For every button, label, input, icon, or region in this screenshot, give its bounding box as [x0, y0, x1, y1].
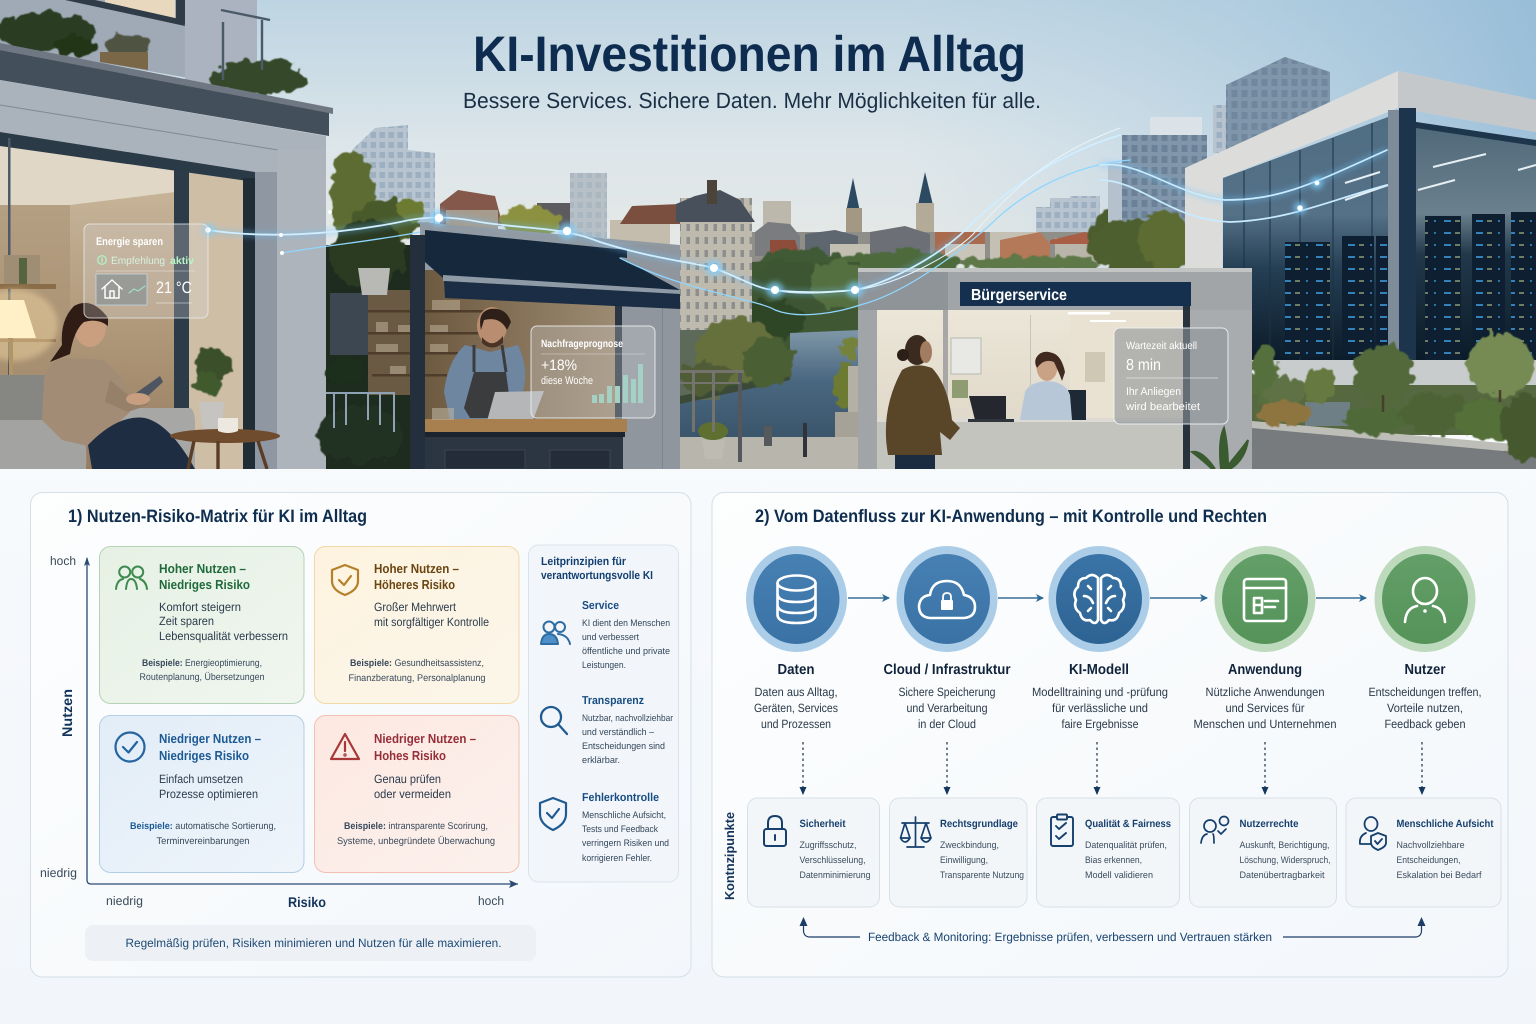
note bar: Regelmäßig prüfen, Risiken minimieren und Nutzen für alle maximieren.: [126, 936, 502, 950]
principle: Fehlerkontrolle: Tests und Feedback: [582, 823, 658, 834]
card: Sicherheit: Zugriffsschutz,: [800, 839, 856, 850]
glass card: Wartezeit: wird bearbeitet: [1125, 401, 1200, 413]
quadrant: high benefit, higher risk: Hoher Nutzen –: [374, 561, 459, 576]
quadrant: high benefit, low risk: Niedriges Risiko: [159, 577, 250, 592]
quadrant: high benefit, low risk: Hoher Nutzen –: [159, 561, 246, 576]
glass card: Energie sparen: 21 °C: [156, 279, 192, 297]
woman on sofa with tablet: [0, 303, 195, 470]
matrix axes: Risiko: [288, 894, 326, 910]
quadrant: low benefit, low risk: Niedriger Nutzen –: [159, 731, 261, 746]
icon: cloud with lock: [919, 581, 975, 618]
card: Rechtsgrundlage: [890, 798, 1027, 907]
city skyline: [352, 125, 1136, 270]
principle: Fehlerkontrolle: korrigieren Fehler.: [582, 852, 652, 863]
principle: Service: KI dient den Menschen: [582, 617, 670, 628]
step: Cloud / Infrastruktur: in der Cloud: [918, 717, 976, 731]
principle: Transparenz: Entscheidungen sind: [582, 740, 665, 751]
heading: data flow: 2) Vom Datenfluss zur KI-Anwendung – mit Kontrolle und Rechten: [755, 506, 1267, 526]
principle: Fehlerkontrolle: verringern Risiken und: [582, 837, 669, 848]
step: Nutzer: Vorteile nutzen,: [1387, 701, 1463, 715]
card: Sicherheit: Datenminimierung: [800, 869, 870, 880]
principle: Transparenz: und verständlich –: [582, 726, 655, 737]
icon: check circle: [116, 732, 144, 762]
matrix axes: niedrig: [40, 866, 77, 880]
quadrant: high benefit, higher risk: Finanzberatung, Personalplanung: [348, 673, 486, 684]
panel: Nutzen-Risiko-Matrix: [30, 492, 691, 977]
quadrant: high benefit, low risk: Routenplanung, Übersetzungen: [140, 671, 264, 683]
step: Nutzer: [1368, 546, 1482, 731]
card: Nutzerrechte: Nutzerrechte: [1240, 818, 1299, 830]
principle: Fehlerkontrolle: Fehlerkontrolle: [582, 792, 659, 804]
card: Menschliche Aufsicht: Eskalation bei Bedarf: [1396, 869, 1482, 880]
card: Rechtsgrundlage: Zweckbindung,: [940, 839, 999, 850]
icon: people: [116, 566, 147, 589]
icon: application window: [1244, 579, 1286, 621]
step: Daten: und Prozessen: [761, 717, 831, 731]
sidebar: Leitprinzipien: [528, 545, 678, 882]
glass card: Energie sparen: [84, 224, 208, 318]
glass card: Energie sparen: aktiv: [170, 255, 194, 267]
step: Anwendung: Menschen und Unternehmen: [1194, 717, 1336, 731]
principle: Service: Leistungen.: [582, 659, 626, 670]
quadrant: low benefit, high risk: Systeme, unbegründete Überwachung: [337, 835, 495, 847]
card: Sicherheit: [748, 798, 880, 907]
step: Nutzer: Feedback geben: [1384, 717, 1466, 731]
icon: brain: [1074, 575, 1125, 623]
sign: Bürgerservice: Bürgerservice: [971, 287, 1067, 304]
card: Qualität & Fairness: [1036, 798, 1180, 907]
step: Cloud / Infrastruktur: [884, 546, 1011, 731]
card: Sicherheit: Verschlüsselung,: [800, 854, 866, 865]
quadrant: high benefit, low risk: Zeit sparen: [159, 614, 214, 628]
quadrant: low benefit, high risk: Niedriger Nutzen –: [374, 731, 476, 746]
glass card: Wartezeit: Wartezeit aktuell: [1126, 340, 1197, 352]
glass card: Energie sparen: Energie sparen: [96, 236, 163, 248]
quadrant: low benefit, high risk: Genau prüfen: [374, 772, 441, 786]
card: Nutzerrechte: Auskunft, Berichtigung,: [1240, 839, 1330, 850]
quadrant: low benefit, low risk: Einfach umsetzen: [159, 772, 243, 786]
quadrant: low benefit, low risk: [100, 716, 304, 872]
card: Qualität & Fairness: Qualität & Fairness: [1085, 818, 1171, 830]
flow arrows: [848, 597, 1366, 599]
icon: scales: [900, 817, 931, 847]
step: Cloud / Infrastruktur: und Verarbeitung: [906, 701, 988, 715]
icon: lock: [764, 816, 786, 846]
quadrant: low benefit, low risk: Niedriges Risiko: [159, 748, 249, 763]
left house, living room: [0, 132, 278, 469]
shopkeeper at laptop: [444, 307, 544, 424]
step: Cloud / Infrastruktur: Sichere Speicherung: [898, 685, 996, 699]
matrix axes: hoch: [50, 554, 76, 568]
step: Daten: [746, 546, 847, 731]
glass card: Nachfrageprognose: diese Woche: [541, 375, 593, 387]
quadrant: low benefit, low risk: Prozesse optimieren: [159, 787, 258, 801]
principle: Service: öffentliche und private: [582, 645, 670, 656]
left house, upper floor: [0, 0, 333, 172]
principle: Service: [541, 600, 670, 670]
feedback loop: [800, 917, 1426, 944]
quadrant: low benefit, high risk: Beispiele: intransparente Scorirung,: [344, 821, 488, 832]
quadrant: high benefit, low risk: Komfort steigern: [159, 600, 241, 614]
quadrant: high benefit, higher risk: mit sorgfältiger Kontrolle: [374, 615, 489, 629]
quadrant: high benefit, higher risk: Großer Mehrwert: [374, 600, 457, 614]
quadrant: high benefit, higher risk: [314, 546, 519, 704]
step: KI-Modell: faire Ergebnisse: [1062, 717, 1139, 731]
step: KI-Modell: KI-Modell: [1069, 662, 1129, 678]
glass card: Wartezeit: [1114, 328, 1228, 424]
quadrant: high benefit, higher risk: Höheres Risiko: [374, 577, 455, 592]
step: Nutzer: Entscheidungen treffen,: [1368, 685, 1482, 699]
card: Nutzerrechte: Datenübertragbarkeit: [1240, 869, 1325, 880]
glass card: Nachfrageprognose: +18%: [541, 357, 577, 374]
houses row: [752, 222, 1136, 264]
glass card: Nachfrageprognose: [531, 326, 655, 418]
garden dark foliage: [316, 150, 425, 469]
step: Daten: Daten aus Alltag,: [754, 685, 838, 699]
icon: users with check: [1201, 816, 1228, 843]
panel: Datenfluss: [712, 492, 1508, 977]
step: Anwendung: Anwendung: [1228, 662, 1302, 678]
card: Qualität & Fairness: Datenqualität prüfen,: [1085, 839, 1167, 850]
step: Anwendung: und Services für: [1226, 701, 1304, 715]
quadrant: low benefit, high risk: [314, 716, 519, 872]
step: KI-Modell: [1032, 546, 1168, 731]
icon: person with shield: [1360, 817, 1386, 850]
card: Qualität & Fairness: Modell validieren: [1085, 869, 1153, 880]
quadrant: high benefit, low risk: Beispiele: Energieoptimierung,: [142, 658, 262, 669]
Bürgerservice building: [858, 268, 1252, 469]
card: Rechtsgrundlage: Einwilligung,: [940, 854, 988, 865]
principle: Fehlerkontrolle: [540, 792, 669, 863]
heading: matrix: 1) Nutzen-Risiko-Matrix für KI im Alltag: [68, 506, 367, 526]
midground: river and bank: [676, 180, 870, 469]
quadrant: low benefit, low risk: Terminvereinbarungen: [156, 836, 250, 847]
mini bar chart: [592, 364, 643, 403]
card: Menschliche Aufsicht: Menschliche Aufsicht: [1396, 818, 1494, 830]
step: Nutzer: Nutzer: [1404, 662, 1446, 678]
principle: Transparenz: [541, 695, 673, 765]
glass card: Wartezeit: 8 min: [1126, 357, 1161, 374]
quadrant: high benefit, low risk: [100, 546, 304, 704]
kiosk counter: [425, 408, 627, 469]
data light streams: [202, 128, 1387, 315]
principle: Transparenz: Nutzbar, nachvollziehbar: [582, 712, 673, 723]
sign: Bürgerservice: [960, 282, 1191, 306]
step: Anwendung: [1194, 546, 1336, 731]
quadrant: high benefit, low risk: Lebensqualität verbessern: [159, 629, 288, 643]
step: Daten: Daten: [778, 662, 814, 678]
step: Daten: Geräten, Services: [754, 701, 838, 715]
icon: clipboard: [1051, 814, 1073, 846]
glass card: Nachfrageprognose: Nachfrageprognose: [541, 338, 623, 350]
note bar: [85, 925, 536, 961]
dotted connectors to control points: [803, 742, 1422, 795]
step: Anwendung: Nützliche Anwendungen: [1206, 685, 1324, 699]
principle: Service: Service: [582, 600, 619, 612]
principle: Transparenz: erklärbar.: [582, 754, 620, 765]
quadrant: low benefit, high risk: Hohes Risiko: [374, 748, 446, 763]
principle: Fehlerkontrolle: Menschliche Aufsicht,: [582, 809, 666, 820]
matrix axes: niedrig: [106, 894, 143, 908]
step: KI-Modell: Modelltraining und -prüfung: [1032, 685, 1168, 699]
sidebar: Leitprinzipien: verantwortungsvolle KI: [541, 570, 653, 582]
step: KI-Modell: für verlässliche und: [1052, 701, 1148, 715]
sidebar: Leitprinzipien: Leitprinzipien für: [541, 556, 626, 568]
foreground plant: [1192, 428, 1248, 469]
card: Menschliche Aufsicht: Entscheidungen,: [1396, 854, 1460, 865]
quadrant: low benefit, high risk: oder vermeiden: [374, 787, 451, 801]
icon: person: [1405, 578, 1445, 622]
kiosk stall: [368, 222, 680, 469]
card: Rechtsgrundlage: Rechtsgrundlage: [940, 818, 1018, 830]
subtitle: Bessere Services. Sichere Daten. Mehr Möglichkeiten für alle.: [463, 88, 1041, 113]
matrix axes: hoch: [478, 894, 504, 908]
quadrant: high benefit, higher risk: Beispiele: Gesundheitsassistenz,: [350, 658, 484, 669]
step: Cloud / Infrastruktur: Cloud / Infrastruktur: [884, 662, 1011, 678]
matrix axes: Nutzen: [59, 689, 75, 737]
principle: Service: und verbessert: [582, 631, 639, 642]
icon: shield: [332, 565, 358, 595]
card: Sicherheit: Sicherheit: [800, 818, 846, 830]
card: Qualität & Fairness: Bias erkennen,: [1085, 854, 1142, 865]
card: Menschliche Aufsicht: Nachvollziehbare: [1396, 839, 1464, 850]
card: Nutzerrechte: Löschung, Widerspruch,: [1240, 854, 1330, 865]
label: Kontrollpunkte: Kontnzipunkte: [722, 812, 737, 900]
customer at counter: [886, 335, 960, 469]
icon: database: [778, 576, 816, 623]
card: Rechtsgrundlage: Transparente Nutzung: [940, 869, 1024, 880]
title: KI-Investitionen im Alltag: [473, 26, 1026, 82]
glass card: Energie sparen: Empfehlung: [111, 255, 165, 267]
quadrant: low benefit, low risk: Beispiele: automatische Sortierung,: [130, 821, 276, 832]
icon: warning triangle: [331, 734, 359, 759]
card: Menschliche Aufsicht: [1346, 798, 1501, 907]
hero illustration: city scene: [0, 0, 1536, 470]
matrix axes: [40, 554, 518, 910]
sky: [0, 0, 1536, 268]
data centre building: [1088, 57, 1536, 469]
trees behind buildings: [498, 204, 1185, 268]
glass card: Wartezeit: Ihr Anliegen: [1126, 386, 1181, 398]
feedback loop: Feedback & Monitoring: Ergebnisse prüfen, verbessern und Vertrauen stärken: [868, 930, 1272, 944]
card: Nutzerrechte: [1190, 798, 1336, 907]
principle: Transparenz: Transparenz: [582, 695, 644, 707]
side table and plant: [170, 348, 280, 469]
